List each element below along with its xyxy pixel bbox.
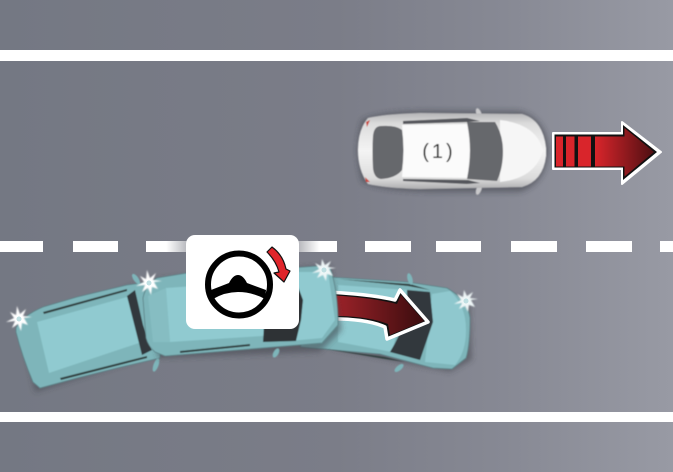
teal car: middle position — [143, 265, 342, 359]
side windows — [43, 289, 147, 380]
rear window — [372, 126, 404, 179]
body — [16, 280, 165, 388]
car body — [358, 113, 546, 189]
roof — [37, 297, 142, 373]
straight red arrow — [553, 122, 661, 184]
windshield — [467, 122, 503, 181]
dashed centre line — [0, 241, 673, 252]
side windows — [320, 279, 430, 362]
impact spark: rear — [6, 306, 32, 331]
white car (1) — [358, 108, 549, 195]
steering wheel icon panel — [186, 235, 299, 329]
side windows — [403, 118, 480, 184]
mirrors — [406, 273, 414, 285]
hood — [290, 272, 335, 341]
curved dark red arrow — [325, 290, 428, 339]
teal car: rear position — [16, 273, 170, 392]
icon: steering wheel — [208, 254, 270, 316]
mirrors — [131, 273, 141, 285]
side window — [180, 344, 250, 353]
impact spark: middle front — [312, 259, 336, 281]
roof — [338, 285, 407, 352]
impact spark: middle rear — [136, 270, 162, 295]
body — [143, 266, 338, 356]
hood highlight — [500, 120, 543, 182]
top lane line — [0, 50, 673, 61]
impact spark: front — [454, 290, 478, 312]
windshield — [263, 284, 303, 342]
teal car: front position — [300, 273, 472, 373]
windshield — [390, 290, 433, 360]
car label: (1) — [422, 141, 456, 163]
rear bumper — [148, 288, 170, 342]
roof — [166, 280, 280, 342]
hood — [425, 291, 466, 365]
tail lights — [365, 120, 370, 182]
icon: turn direction arrow — [267, 247, 290, 282]
body — [300, 277, 470, 369]
bottom lane line — [0, 412, 673, 422]
roof — [402, 124, 470, 178]
mirror — [271, 347, 281, 359]
rear window — [127, 290, 152, 355]
mirrors — [475, 108, 483, 120]
